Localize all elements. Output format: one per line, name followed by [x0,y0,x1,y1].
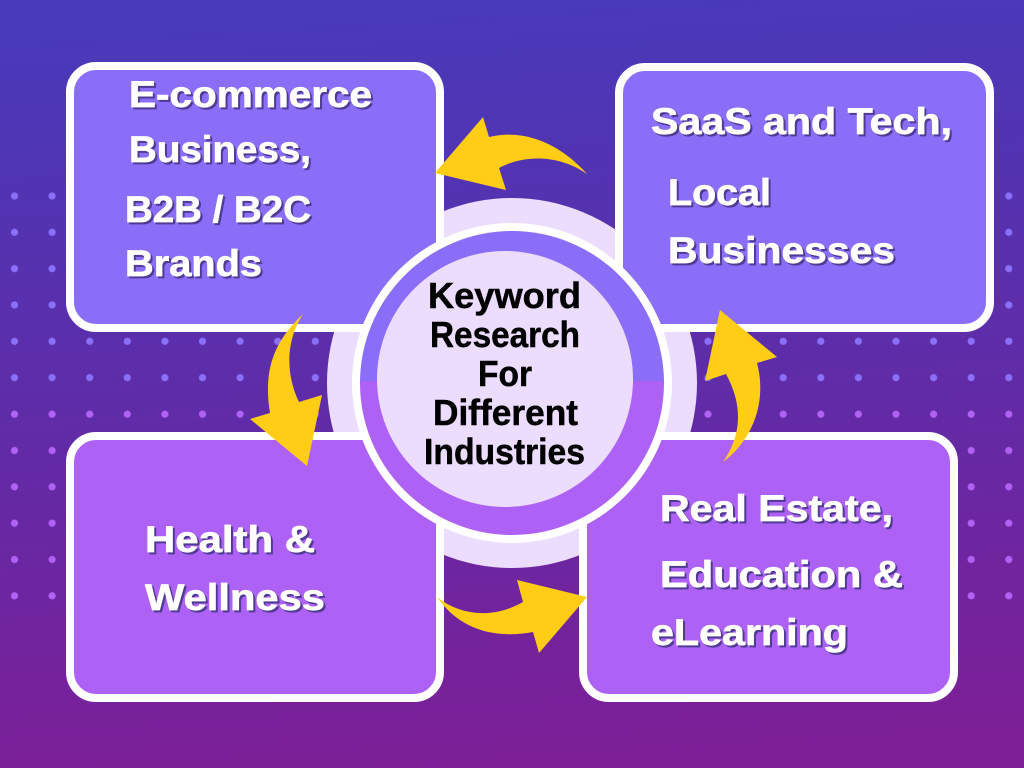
center title: For [478,353,532,394]
panel text: e-commerce: E-commerce [129,74,372,115]
arrow: top, pointing left [435,117,587,190]
panel: e-commerce [70,66,440,328]
center title: Different [433,392,578,433]
panel text: saas and local: SaaS and Tech, [651,101,952,142]
panel: real estate and education [583,436,954,698]
arrow: right, pointing up [705,310,777,462]
panel text: e-commerce: Business, [129,129,311,170]
panel text: health and wellness: Health & [145,519,315,560]
dot pattern: left [0,178,334,614]
panel text: health and wellness: Wellness [145,577,325,618]
panel text: real estate and education [651,488,903,653]
panel text: saas and local: Businesses [668,230,895,271]
panel text: saas and local [651,101,952,271]
center title: Industries [424,431,585,472]
panel text: real estate and education: Education & [660,554,903,595]
panel: health and wellness [70,436,440,698]
panel text: e-commerce [125,74,372,284]
dot pattern: right [689,178,1024,614]
arrow: bottom, pointing right [437,580,587,653]
center title: Keyword [428,275,581,316]
pale halo circle behind the panels [327,198,697,568]
panel text: real estate and education: Real Estate, [660,488,893,529]
center title [424,275,585,472]
panel text: health and wellness [145,519,325,618]
panel: saas and local [619,67,990,328]
panel text: real estate and education: eLearning [651,612,848,653]
panel text: saas and local: Local [668,172,771,213]
panel text: e-commerce: Brands [125,243,262,284]
arrow: left, pointing down [250,314,322,466]
center title: Research [430,314,580,355]
center hub [352,223,672,543]
panel text: e-commerce: B2B / B2C [125,189,311,230]
